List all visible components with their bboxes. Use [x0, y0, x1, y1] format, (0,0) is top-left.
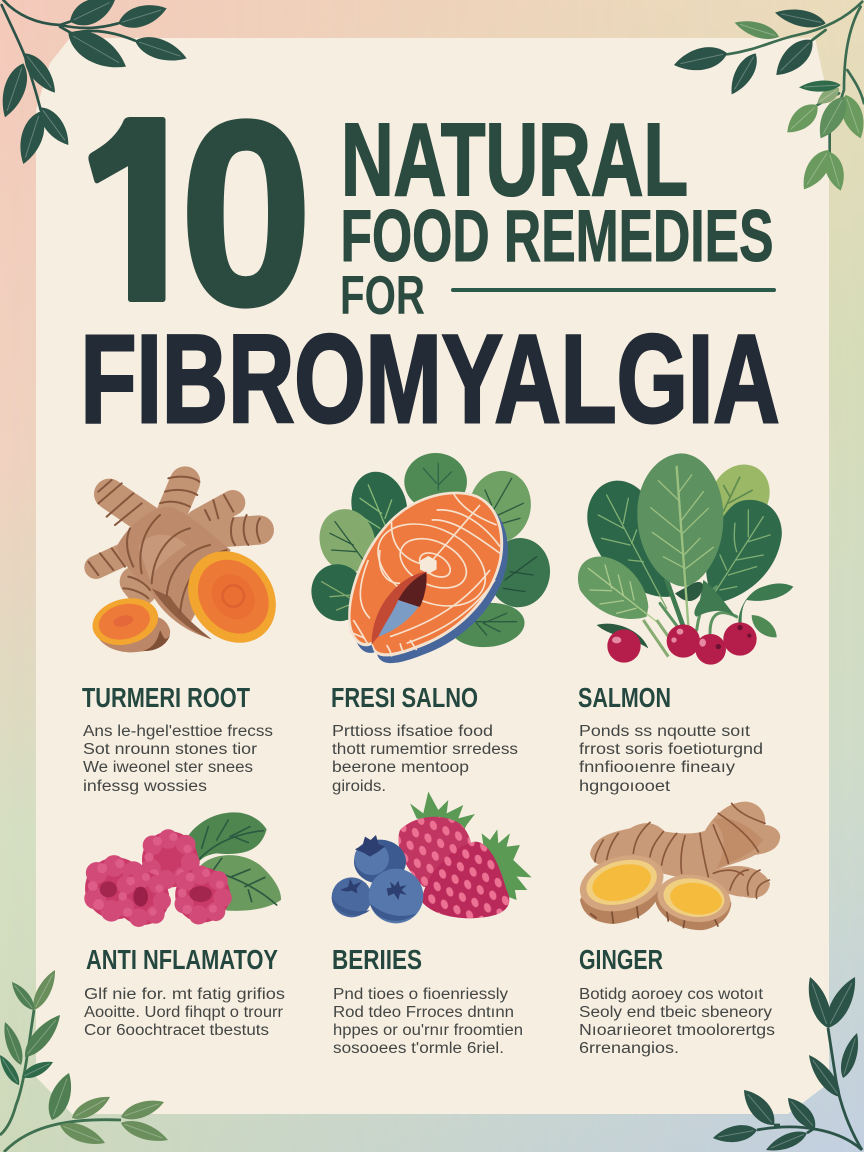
description: beerone mentoop	[332, 759, 469, 776]
heading: FRESI SALNO	[331, 682, 478, 713]
description: Pnd tioes o fioenriessly	[333, 986, 508, 1003]
title block	[86, 117, 779, 424]
branch: top-left leaves	[0, 0, 190, 167]
heading: SALMON	[578, 682, 671, 713]
description	[332, 723, 518, 795]
icon: ginger with slices	[574, 802, 780, 930]
title number 10: 1	[78, 58, 257, 359]
icon: blueberries and strawberries	[332, 792, 532, 923]
title line FOR: FOR	[340, 264, 425, 326]
description: Sot nrounn stones tior	[83, 741, 257, 758]
description	[579, 723, 763, 795]
description: Aooitte. Uord fihqpt o trourr	[84, 1004, 283, 1021]
icon: raspberries with leaves	[84, 812, 281, 927]
description: Botidg aoroey cos wotoıt	[579, 986, 764, 1003]
icon: turmeric root	[88, 477, 294, 660]
card: salmon text	[578, 682, 763, 795]
icon: salmon steak on leaves	[303, 453, 554, 663]
heading: TURMERI ROOT	[82, 682, 250, 713]
card: turmeric root text	[82, 682, 273, 795]
card: ginger text	[579, 944, 775, 1057]
description: Ponds ss nqoutte soıt	[579, 723, 751, 740]
description: Seoly end tbeic sbeneory	[579, 1004, 772, 1021]
description: infessg wossies	[83, 778, 207, 795]
heading: BERIIES	[332, 944, 422, 975]
description: Rod tdeo Frroces dntınn	[333, 1004, 514, 1021]
description: We iweonel ster snees	[83, 759, 253, 776]
description: 6rrenangios.	[579, 1040, 679, 1057]
branch: bottom-right leaves	[712, 973, 863, 1152]
heading: GINGER	[579, 944, 663, 975]
description	[84, 986, 285, 1039]
title number 10: 0	[180, 67, 313, 360]
description: thott rumemtior srredess	[332, 741, 518, 758]
description	[579, 986, 775, 1057]
description: hppes or ou'rnır froomtien	[333, 1022, 523, 1039]
title rule	[451, 288, 776, 292]
description: hgngoıooet	[579, 778, 671, 795]
description: sosooees t'ormle 6riel.	[333, 1040, 504, 1057]
icon: spinach leaves and berries	[578, 453, 793, 665]
description: fnnfiooıenre fineaıy	[579, 759, 735, 776]
description: Nıoarıieoret tmoolorertgs	[579, 1022, 775, 1039]
card: anti inflammatory text	[84, 944, 285, 1039]
title number 10	[88, 117, 305, 309]
description: Glf nie for. mt fatig grifios	[84, 986, 285, 1003]
description: giroids.	[332, 778, 386, 795]
card: berries text	[332, 944, 523, 1057]
description: Cor 6oochtracet tbestuts	[84, 1022, 269, 1039]
description: Prttioss ifsatioe food	[332, 723, 493, 740]
description: frrost soris foetioturgnd	[579, 741, 763, 758]
title line NATURAL: NATURAL	[341, 102, 688, 217]
description: Ans le-hgel'esttioe frecss	[83, 723, 273, 740]
branch: bottom-left leaves	[0, 967, 171, 1152]
branch: top-right leaves	[672, 2, 864, 195]
card: fresh salmon text	[331, 682, 518, 795]
heading: ANTI NFLAMATOY	[86, 944, 278, 975]
description	[333, 986, 523, 1057]
description	[83, 723, 273, 795]
